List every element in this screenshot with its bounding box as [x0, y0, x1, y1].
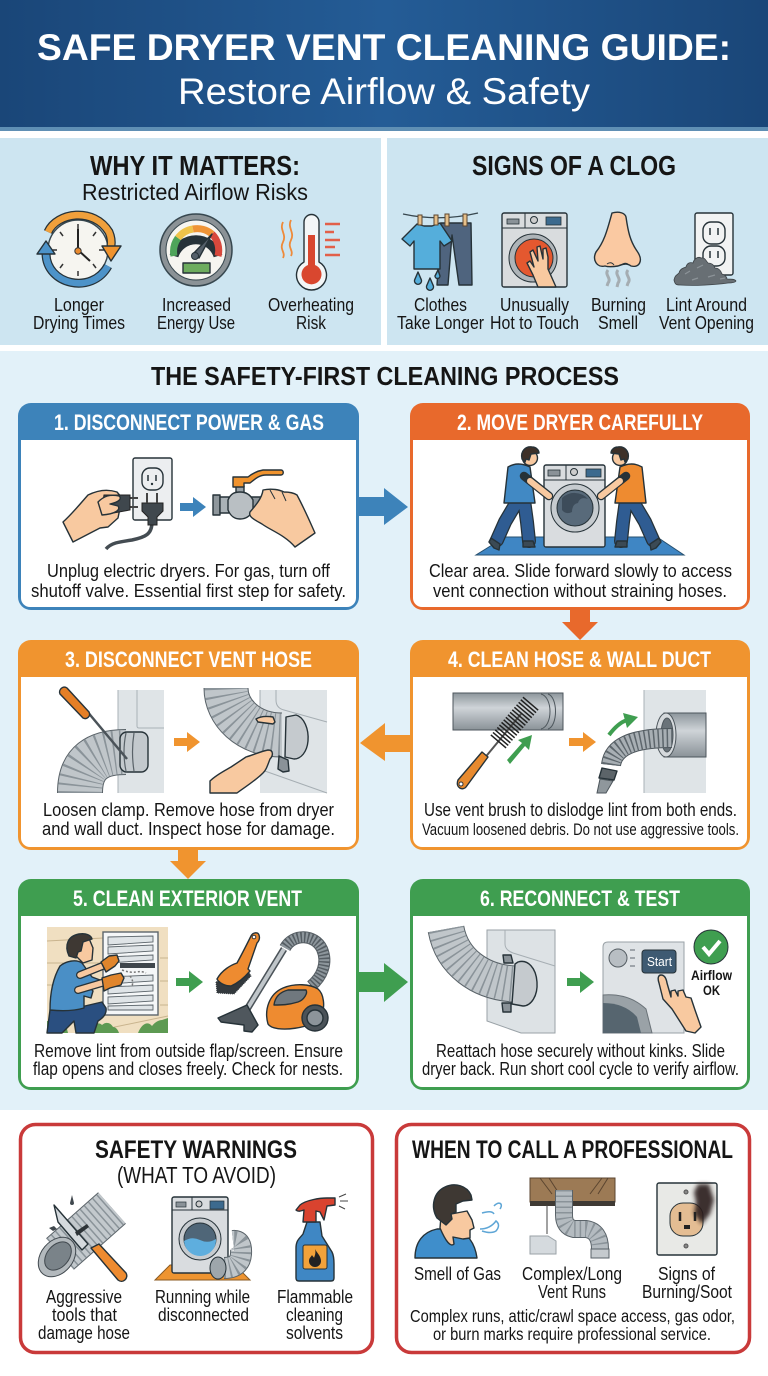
icon: two people moving dryer on mat — [476, 447, 684, 555]
icon: nose — [595, 212, 640, 287]
step 1 text: shutoff valve. Essential first step for safety. — [31, 581, 346, 601]
icon: green check — [694, 930, 728, 964]
label: Aggressive — [46, 1287, 122, 1307]
icon: complex vent duct — [530, 1178, 615, 1258]
airflow ok label: Airflow — [691, 968, 732, 983]
label: Lint Around — [666, 295, 747, 315]
label: Clothes — [414, 295, 467, 315]
step 1 text: Unplug electric dryers. For gas, turn off — [47, 561, 331, 581]
label: Energy Use — [157, 313, 235, 333]
title: SAFE DRYER VENT CLEANING GUIDE: — [37, 27, 731, 68]
label: Increased — [162, 295, 231, 315]
icon: vacuum hose in wall duct — [597, 690, 706, 793]
icon: dryer running with disconnected hose — [155, 1197, 250, 1280]
professional service text: or burn marks require professional service. — [433, 1324, 711, 1344]
label: Signs of — [658, 1264, 716, 1284]
label: Drying Times — [33, 313, 125, 333]
subtitle: Restore Airflow & Safety — [178, 71, 591, 112]
subheading: what to avoid: (WHAT TO AVOID) — [117, 1162, 276, 1188]
step 6 title: 6. RECONNECT & TEST — [480, 886, 680, 911]
step 3 text — [42, 800, 335, 839]
panel: step 1 — [18, 403, 359, 610]
arrow — [567, 971, 594, 993]
label: Risk — [296, 313, 327, 333]
label: disconnected — [158, 1305, 249, 1325]
subheading: restricted airflow: Restricted Airflow Risks — [82, 179, 308, 205]
icon: person smelling gas — [415, 1185, 501, 1258]
step 2 text: Clear area. Slide forward slowly to access — [429, 561, 732, 581]
icon: person cleaning exterior vent — [47, 927, 168, 1033]
icon: thermometer — [282, 215, 340, 290]
label: Longer — [54, 295, 104, 315]
panel: step 2 — [410, 403, 750, 610]
icon: removing hose by hand — [210, 688, 327, 793]
arrow — [174, 732, 200, 752]
icon: energy gauge — [160, 214, 232, 286]
icon: burnt outlet — [657, 1183, 717, 1255]
panel: safety warnings — [20, 1124, 372, 1352]
arrow — [180, 497, 206, 517]
label: Vent Runs — [538, 1282, 606, 1302]
step 5 text: Remove lint from outside flap/screen. Ensure — [34, 1041, 343, 1061]
step 4 title: 4. CLEAN HOSE & WALL DUCT — [448, 647, 711, 672]
label: tools that — [52, 1305, 117, 1325]
step 3 text: and wall duct. Inspect hose for damage. — [42, 819, 335, 839]
icon: wet clothes on line — [402, 213, 478, 290]
arrow: step 1 to 2 — [358, 488, 408, 525]
icon: flammable spray bottle — [296, 1194, 348, 1281]
label: Overheating — [268, 295, 354, 315]
heading: safety warnings: SAFETY WARNINGS — [95, 1136, 297, 1164]
label: Complex/Long — [522, 1264, 622, 1284]
panel: step 4 — [410, 640, 750, 850]
label: Hot to Touch — [490, 313, 579, 333]
label: Running while — [155, 1287, 250, 1307]
label: Burning — [591, 295, 646, 315]
step 3 text: Loosen clamp. Remove hose from dryer — [43, 800, 334, 820]
icon: clock — [37, 215, 121, 283]
arrow — [569, 732, 596, 752]
icon: brush in duct — [453, 693, 563, 789]
icon: start button with finger: Start — [647, 955, 672, 969]
step 5 text — [33, 1041, 343, 1079]
airflow ok label — [691, 968, 732, 998]
label: Smell of Gas — [414, 1264, 501, 1284]
step 1 title: 1. DISCONNECT POWER & GAS — [54, 410, 324, 435]
label: Flammable — [277, 1287, 353, 1307]
header banner — [0, 0, 768, 131]
airflow ok label: OK — [703, 983, 720, 998]
icon: reattached hose — [446, 929, 555, 1033]
label: Take Longer — [397, 313, 484, 333]
panel: step 3 — [18, 640, 359, 850]
step 3 title: 3. DISCONNECT VENT HOSE — [65, 647, 312, 672]
step 4 text — [422, 800, 739, 839]
step 2 text: vent connection without straining hoses. — [433, 581, 727, 601]
icon: hot dryer — [502, 213, 567, 287]
icon: hand closing gas valve — [213, 470, 315, 547]
panel: signs of a clog — [387, 138, 768, 345]
label: Unusually — [500, 295, 569, 315]
professional service text — [410, 1306, 735, 1344]
label: solvents — [286, 1323, 343, 1343]
panel: why it matters — [0, 138, 381, 345]
arrow — [176, 971, 203, 993]
arrow: step 4 to 3 — [360, 723, 410, 761]
icon: start button with finger — [603, 942, 701, 1033]
icon: hand unplugging from outlet — [63, 458, 172, 549]
heading: why it matters: WHY IT MATTERS: — [90, 150, 300, 181]
icon: outlet with lint pile — [674, 213, 736, 285]
step 2 title: 2. MOVE DRYER CAREFULLY — [457, 410, 703, 435]
step 5 text: flap opens and closes freely. Check for nests. — [33, 1059, 343, 1079]
label: Vent Opening — [659, 313, 754, 333]
left person — [489, 447, 549, 550]
panel: step 6 — [410, 879, 750, 1090]
panel: step 5 — [18, 879, 359, 1090]
arrow: step 2 to 4 — [562, 610, 598, 640]
panel: when to call a professional — [396, 1124, 750, 1352]
icon: knife cutting hose — [31, 1195, 127, 1284]
icon: vacuum cleaner — [218, 937, 328, 1032]
step 6 text — [422, 1041, 739, 1079]
heading: cleaning process: THE SAFETY-FIRST CLEANING PROCESS — [151, 361, 619, 391]
label: Burning/Soot — [642, 1282, 732, 1302]
step 2 text — [429, 561, 732, 601]
step 1 text — [31, 561, 346, 601]
right person — [601, 447, 661, 550]
label: damage hose — [38, 1323, 130, 1343]
icon: brush — [216, 933, 259, 994]
label: cleaning — [286, 1305, 343, 1325]
step 5 title: 5. CLEAN EXTERIOR VENT — [73, 886, 302, 911]
label: Smell — [598, 313, 638, 333]
icon: screwdriver loosening clamp — [60, 687, 164, 793]
arrow: step 3 to 5 — [170, 850, 206, 879]
heading: signs of a clog: SIGNS OF A CLOG — [472, 150, 676, 181]
arrow: step 5 to 6 — [358, 963, 408, 1002]
